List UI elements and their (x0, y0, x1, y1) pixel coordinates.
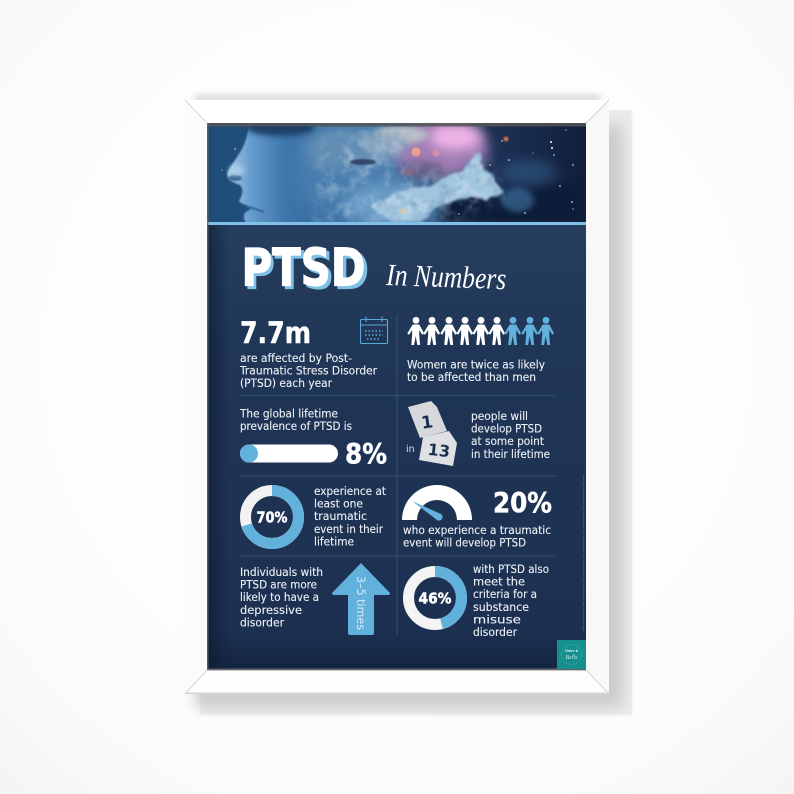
panel: depressive disorder: depressive (240, 603, 302, 617)
donut chart: 46%: 46% (418, 590, 452, 608)
panel: 7.7m affected (239, 316, 388, 390)
panel: global lifetime prevalence (239, 406, 387, 470)
vertical source note (582, 475, 584, 632)
arrow: 3-5 times (332, 563, 390, 635)
arrow: 3-5 times: 3–5 times (354, 576, 368, 630)
frame drop shadow (195, 94, 632, 715)
icon: row of people (407, 317, 554, 345)
panel: 1 in 13: at some point (471, 434, 544, 448)
grid dividers (240, 315, 555, 635)
panel: women twice as likely: to be affected than men (407, 370, 536, 384)
panel: depressive disorder: Individuals with (240, 565, 323, 579)
panel: 20% gauge: who experience a traumatic (403, 523, 551, 537)
progress bar (240, 444, 338, 462)
panel: 20% gauge: event will develop PTSD (403, 536, 526, 550)
dark lower-right space (440, 180, 586, 222)
panel: 70% traumatic event: lifetime (314, 534, 354, 548)
panel: 46% substance misuse (408, 562, 549, 639)
subtitle: In Numbers (385, 257, 507, 296)
panel: 46% substance misuse: with PTSD also (473, 562, 549, 576)
donut chart: 46% (408, 572, 462, 624)
panel: 46% substance misuse: disorder (473, 625, 517, 639)
panel: 46% substance misuse: criteria for a (473, 587, 537, 601)
panel: 70% traumatic event: experience at (314, 484, 386, 498)
panel: 70% traumatic event: event in their (314, 522, 383, 536)
panel: 1 in 13 (406, 401, 550, 466)
cloud texture (310, 130, 505, 222)
panel: global lifetime prevalence: prevalence of PTSD is (240, 419, 352, 433)
panel: 1 in 13: people will (471, 409, 528, 423)
panel: 70% traumatic event: least one (314, 496, 363, 510)
face profile (226, 126, 311, 222)
panel: 7.7m affected: Traumatic Stress Disorder (239, 364, 377, 378)
stars (222, 129, 574, 215)
donut chart: 70% (246, 490, 298, 544)
title: PTSD (242, 238, 366, 298)
panel: global lifetime prevalence: The global lifetime (239, 406, 338, 420)
logo badge (557, 640, 586, 669)
title: PTSD (244, 242, 369, 302)
panel: 46% substance misuse: substance (473, 600, 529, 614)
panel: women twice as likely (407, 317, 554, 384)
logo badge: Claire & (565, 649, 579, 653)
panel: 1 in 13: develop PTSD (471, 422, 542, 436)
donut chart: 70%: 70% (256, 508, 288, 526)
panel: 46% substance misuse: misuse (473, 612, 521, 626)
panel: 70% traumatic event (246, 484, 386, 548)
icon: page with 1: 1 (420, 412, 434, 434)
panel: 1 in 13: in their lifetime (471, 447, 550, 461)
icon: page with 13 (419, 431, 457, 466)
panel: 20% gauge: 20% (493, 486, 552, 519)
poster panel (207, 123, 586, 670)
panel: 46% substance misuse: meet the (473, 574, 525, 588)
panel: 7.7m affected: are affected by Post- (240, 351, 352, 365)
header divider line (207, 222, 586, 225)
panel: women twice as likely: Women are twice as likely (407, 358, 545, 372)
dark cloud gap (350, 159, 376, 165)
panel: global lifetime prevalence: 8% (345, 437, 387, 470)
panel: 70% traumatic event: traumatic (314, 509, 367, 523)
panel: 7.7m affected: 7.7m (240, 316, 311, 350)
icon: page with 1 (408, 401, 447, 438)
icon: page with 13: 13 (427, 440, 451, 461)
panel: depressive disorder: likely to have a (240, 590, 319, 604)
panel: depressive disorder: disorder (240, 616, 284, 630)
panel: 1 in 13: in (406, 444, 415, 455)
poster edge shading (207, 123, 586, 670)
gauge chart (402, 485, 472, 521)
panel: depressive disorder (240, 563, 390, 635)
cloud mass (300, 130, 504, 225)
panel: 20% gauge (402, 485, 552, 550)
panel: depressive disorder: PTSD are more (240, 578, 317, 592)
nebula glow (372, 120, 488, 179)
white frame (185, 100, 609, 694)
panel: 7.7m affected: (PTSD) each year (240, 376, 332, 390)
icon: calendar (360, 316, 388, 344)
header image: face dissolving into nebula (207, 118, 586, 225)
logo badge: Bells (566, 655, 578, 661)
